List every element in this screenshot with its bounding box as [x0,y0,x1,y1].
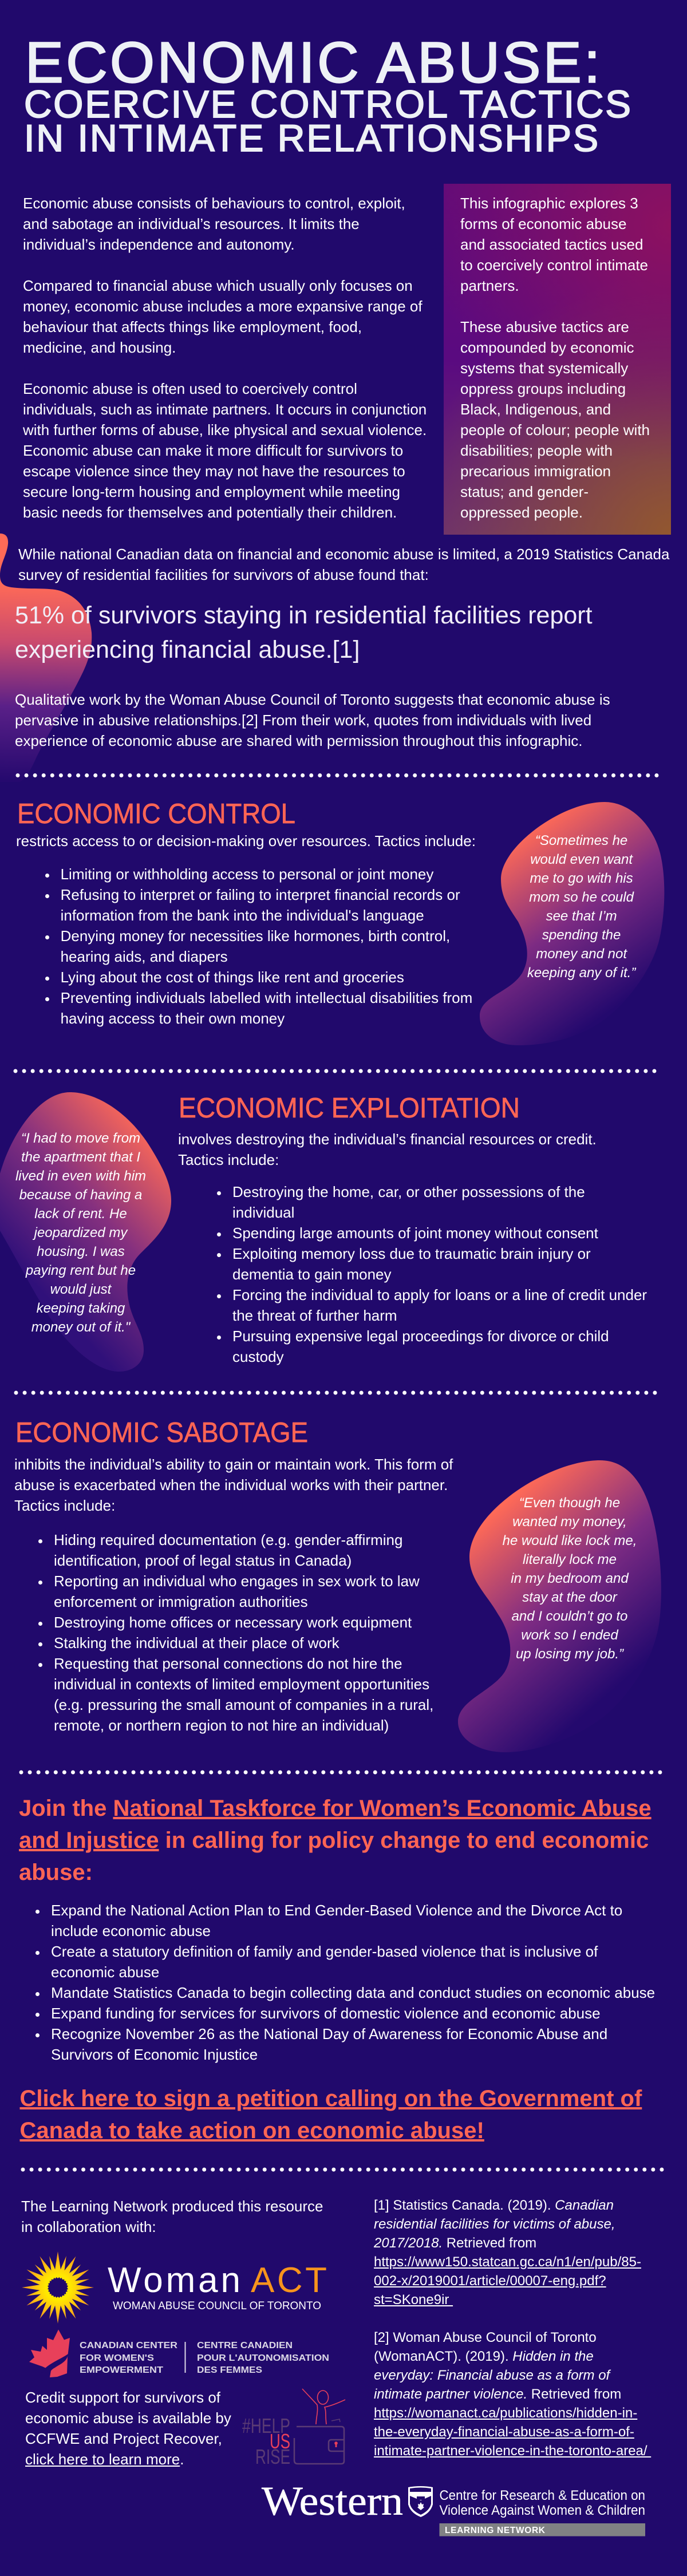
policy demands list [35,1902,655,2063]
policy demands list: Survivors of Economic Injustice [51,2046,258,2063]
tactics list: identification, proof of legal status in Canada) [54,1551,352,1568]
policy demands list: Expand the National Action Plan to End Gender-Based Violence and the Divorce Act to [51,1902,622,1919]
tactics list [217,1183,647,1365]
quote: see that I’m [546,908,617,924]
tactics list: Exploiting memory loss due to traumatic brain injury or [232,1244,591,1262]
tactics list [45,866,472,1027]
quote: he would like lock me, [503,1533,637,1548]
quote: because of having a [19,1187,142,1202]
panel: economic control [16,799,664,1045]
quote: lived in even with him [15,1168,146,1184]
panel: scope of infographic: partners. [460,277,519,294]
intro text block: with further forms of abuse, like physical and sexual violence. [23,421,427,438]
title: COERCIVE CONTROL TACTICS [24,83,631,126]
petition link: Click here to sign a petition calling on the Government of [19,2086,642,2111]
tactics list: Spending large amounts of joint money without consent [232,1224,598,1241]
call to action heading: abuse: [19,1859,93,1884]
tactics list: individual in contexts of limited employment opportunities [54,1675,429,1692]
tactics list: Stalking the individual at their place of work [54,1634,339,1651]
policy demands list: Recognize November 26 as the National Day of Awareness for Economic Abuse and [51,2025,607,2042]
intro text block [23,195,427,521]
definition: abuse is exacerbated when the individual works with their partner. [14,1476,448,1493]
tactics list: custody [232,1348,284,1365]
intro text block: Economic abuse is often used to coercively control [23,380,357,397]
quote: “I had to move from [21,1130,140,1146]
big statistic: experiencing financial abuse.[1] [15,636,360,663]
intro text block: medicine, and housing. [23,339,176,356]
panel: scope of infographic: systems that systemically [460,359,628,377]
tactics list: Denying money for necessities like hormones, birth control, [61,927,450,945]
policy demands list: Mandate Statistics Canada to begin collecting data and conduct studies on economic abuse [51,1984,655,2001]
tactics list: remote, or northern region to not hire an individual) [54,1716,389,1733]
references: 002-x/2019001/article/00007-eng.pdf? [374,2273,606,2289]
quote: would even want [530,852,633,867]
intro text block: escape violence since they may not have the resources to [23,463,405,480]
panel: scope of infographic: oppress groups including [460,380,626,397]
intro text block: Economic abuse can make it more difficult for survivors to [23,442,403,459]
logo: Help Us Rise: #HELP [242,2414,290,2437]
collaboration text: The Learning Network produced this resource [21,2197,323,2214]
logo: Canadian Center for Women's Empowerment [29,2330,329,2377]
quote: lack of rent. He [34,1206,127,1222]
panel: scope of infographic: Black, Indigenous, and [460,401,611,418]
tactics list: Refusing to interpret or failing to interpret financial records or [61,886,460,903]
big statistic [15,602,593,663]
credit support text [25,2388,231,2467]
quote: up losing my job.” [516,1646,623,1661]
quote: keeping any of it.” [527,965,635,980]
logo: Canadian Center for Women's Empowerment: CENTRE CANADIEN [197,2341,293,2350]
tactics list: Preventing individuals labelled with intellectual disabilities from [61,989,472,1006]
title [24,34,631,159]
policy demands list: Create a statutory definition of family and gender-based violence that is inclusive of [51,1943,598,1960]
qualitative work text [15,691,610,749]
tactics list: Destroying the home, car, or other possessions of the [232,1183,585,1200]
quote blob [0,1092,172,1372]
credit support text: economic abuse is available by [25,2409,231,2426]
tactics list: Hiding required documentation (e.g. gender-affirming [54,1531,402,1548]
quote: mom so he could [529,890,634,904]
panel: scope of infographic [443,184,671,535]
policy demands list: economic abuse [51,1963,159,1981]
panel: economic exploitation [0,1092,647,1372]
quote: me to go with his [530,870,633,886]
panel: statistic [0,534,670,775]
quote: work so I ended [521,1627,618,1643]
quote: paying rent but he [26,1263,136,1278]
logo: WomanACT [22,2251,327,2324]
definition [14,1455,453,1514]
definition [178,1130,597,1168]
tactics list: Lying about the cost of things like rent and groceries [61,969,404,986]
panel: scope of infographic: status; and gender- [460,483,589,500]
panel: scope of infographic: disabilities; people with [460,442,613,459]
credit support text: click here to learn more. [25,2450,184,2467]
definition: restricts access to or decision-making over resources. Tactics include: [16,832,476,850]
panel: scope of infographic: compounded by economic [460,339,634,356]
decorative blob: statistic [0,534,92,775]
policy demands list: include economic abuse [51,1922,211,1939]
quote [503,1495,637,1661]
references: the-everyday-financial-abuse-as-a-form-of- [374,2424,634,2440]
tactics list: Reporting an individual who engages in sex work to law [54,1572,420,1589]
big statistic: 51% of survivors staying in residential facilities report [15,602,593,629]
quote: spending the [542,927,621,942]
survey intro text: survey of residential facilities for survivors of abuse found that: [18,566,429,583]
panel: economic sabotage [14,1418,661,1752]
quote [15,1130,146,1335]
quote: stay at the door [522,1589,617,1605]
intro text block: and sabotage an individual’s resources. It limits the [23,215,360,232]
call to action heading: Join the National Taskforce for Women’s Economic Abuse [19,1795,652,1820]
panel: scope of infographic: These abusive tactics are [460,318,629,335]
icon: crest [408,2486,433,2517]
icon: sunburst [22,2251,94,2324]
logo: Canadian Center for Women's Empowerment: POUR L'AUTONOMISATION [197,2353,329,2363]
quote: in my bedroom and [511,1571,629,1586]
tactics list: dementia to gain money [232,1265,392,1282]
quote: money out of it." [31,1319,130,1335]
quote blob [480,802,664,1045]
quote: and I couldn’t go to [512,1609,627,1623]
qualitative work text: experience of economic abuse are shared with permission throughout this infographic. [15,732,582,749]
logo: WomanACT: WOMAN ABUSE COUNCIL OF TORONTO [113,2300,321,2312]
tactics list: Pursuing expensive legal proceedings for divorce or child [232,1327,609,1344]
panel: scope of infographic: people of colour; people with [460,421,650,438]
quote: literally lock me [523,1551,617,1567]
tactics list: Requesting that personal connections do not hire the [54,1654,402,1672]
panel: scope of infographic: and associated tactics used [460,236,643,253]
logo: WomanACT: Woman [108,2261,240,2300]
references: st=SKone9ir [374,2292,449,2307]
quote: would just [50,1281,111,1297]
petition link: Canada to take action on economic abuse! [19,2118,484,2143]
collaboration text [21,2197,323,2235]
tactics list: individual [232,1203,294,1220]
quote blob [458,1460,661,1752]
policy demands list: Expand funding for services for survivors of domestic violence and economic abuse [51,2005,601,2022]
references: https://womanact.ca/publications/hidden-in- [374,2405,637,2420]
definition: inhibits the individual’s ability to gain or maintain work. This form of [14,1455,453,1472]
references [373,2197,652,2458]
logo: Canadian Center for Women's Empowerment: EMPOWERMENT [80,2365,163,2375]
intro text block: basic needs for themselves and potentially their children. [23,504,397,521]
icon: maple leaf [29,2330,70,2377]
quote: “Even though he [519,1495,620,1510]
tactics list: having access to their own money [61,1010,285,1027]
logo: Canadian Center for Women's Empowerment: FOR WOMEN'S [80,2353,154,2363]
survey intro text: While national Canadian data on financial and economic abuse is limited, a 2019 Statistics Canada [18,545,669,562]
quote: keeping taking [37,1301,125,1315]
call to action heading: and Injustice in calling for policy change to end economic [19,1827,649,1852]
panel: scope of infographic: This infographic explores 3 [460,195,638,212]
intro text block: secure long-term housing and employment while meeting [23,483,400,500]
references: intimate partner violence. Retrieved from [374,2386,621,2402]
logo: WomanACT: ACT [251,2261,327,2300]
panel: scope of infographic: to coercively control intimate [460,256,648,274]
tactics list: (e.g. pressuring the small amount of companies in a rural, [54,1696,433,1713]
logo: Western Learning Network [261,2483,645,2536]
references: https://www150.statcan.gc.ca/n1/en/pub/85- [374,2254,641,2269]
logo: Help Us Rise: US [270,2429,290,2453]
tactics list: hearing aids, and diapers [61,948,228,965]
quote: the apartment that I [21,1149,140,1164]
tactics list: Limiting or withholding access to personal or joint money [61,866,433,883]
panel: call to action [19,1795,655,2143]
references: everyday: Financial abuse as a form of [374,2368,610,2383]
call to action heading [19,1795,652,1884]
intro text block: behaviour that affects things like employment, food, [23,318,362,335]
quote [527,832,637,980]
panel: scope of infographic: precarious immigration [460,463,611,480]
definition: Tactics include: [14,1496,115,1514]
logo: Help Us Rise [242,2388,346,2467]
collaboration text: in collaboration with: [21,2218,156,2235]
logo: Western Learning Network: LEARNING NETWORK [445,2526,546,2535]
references: residential facilities for victims of abuse, [374,2217,615,2231]
references: [2] Woman Abuse Council of Toronto [374,2330,597,2345]
qualitative work text: pervasive in abusive relationships.[2] From their work, quotes from individuals with lived [15,712,591,729]
tactics list: enforcement or immigration authorities [54,1593,308,1610]
tactics list [38,1531,433,1733]
references: intimate-partner-violence-in-the-toronto-area/ [374,2443,647,2458]
tactics list: Destroying home offices or necessary work equipment [54,1613,412,1630]
tactics list: Forcing the individual to apply for loans or a line of credit under [232,1286,647,1303]
quote: money and not [536,946,627,962]
quote: “Sometimes he [535,832,627,848]
intro text block: Compared to financial abuse which usually only focuses on [23,277,413,294]
tactics list: information from the bank into the individual's language [61,907,424,924]
intro text block: individuals, such as intimate partners. It occurs in conjunction [23,401,427,418]
logo: Canadian Center for Women's Empowerment: DES FEMMES [197,2365,262,2375]
logo: Canadian Center for Women's Empowerment: CANADIAN CENTER [80,2341,177,2350]
panel: scope of infographic: forms of economic abuse [460,215,626,232]
references: 2017/2018. Retrieved from [374,2235,536,2251]
intro text block: individual’s independence and autonomy. [23,236,295,253]
panel: credits and references [21,2197,652,2536]
credit support text: CCFWE and Project Recover, [25,2429,222,2447]
credit support text: Credit support for survivors of [25,2388,220,2405]
intro text block: money, economic abuse includes a more expansive range of [23,298,423,315]
title: IN INTIMATE RELATIONSHIPS [24,117,598,159]
quote: jeopardized my [34,1225,127,1240]
petition link [19,2086,642,2143]
definition: Tactics include: [178,1151,279,1168]
definition: involves destroying the individual’s financial resources or credit. [178,1130,597,1147]
references: (WomanACT). (2019). Hidden in the [374,2348,594,2364]
references: [1] Statistics Canada. (2019). Canadian [374,2197,614,2213]
panel: scope of infographic: oppressed people. [460,504,583,521]
qualitative work text: Qualitative work by the Woman Abuse Council of Toronto suggests that economic abuse is [15,691,610,708]
tactics list: the threat of further harm [232,1306,397,1323]
quote: housing. I was [37,1243,125,1259]
intro text block: Economic abuse consists of behaviours to control, exploit, [23,195,405,212]
survey intro text [18,545,670,583]
quote: wanted my money, [512,1514,627,1530]
